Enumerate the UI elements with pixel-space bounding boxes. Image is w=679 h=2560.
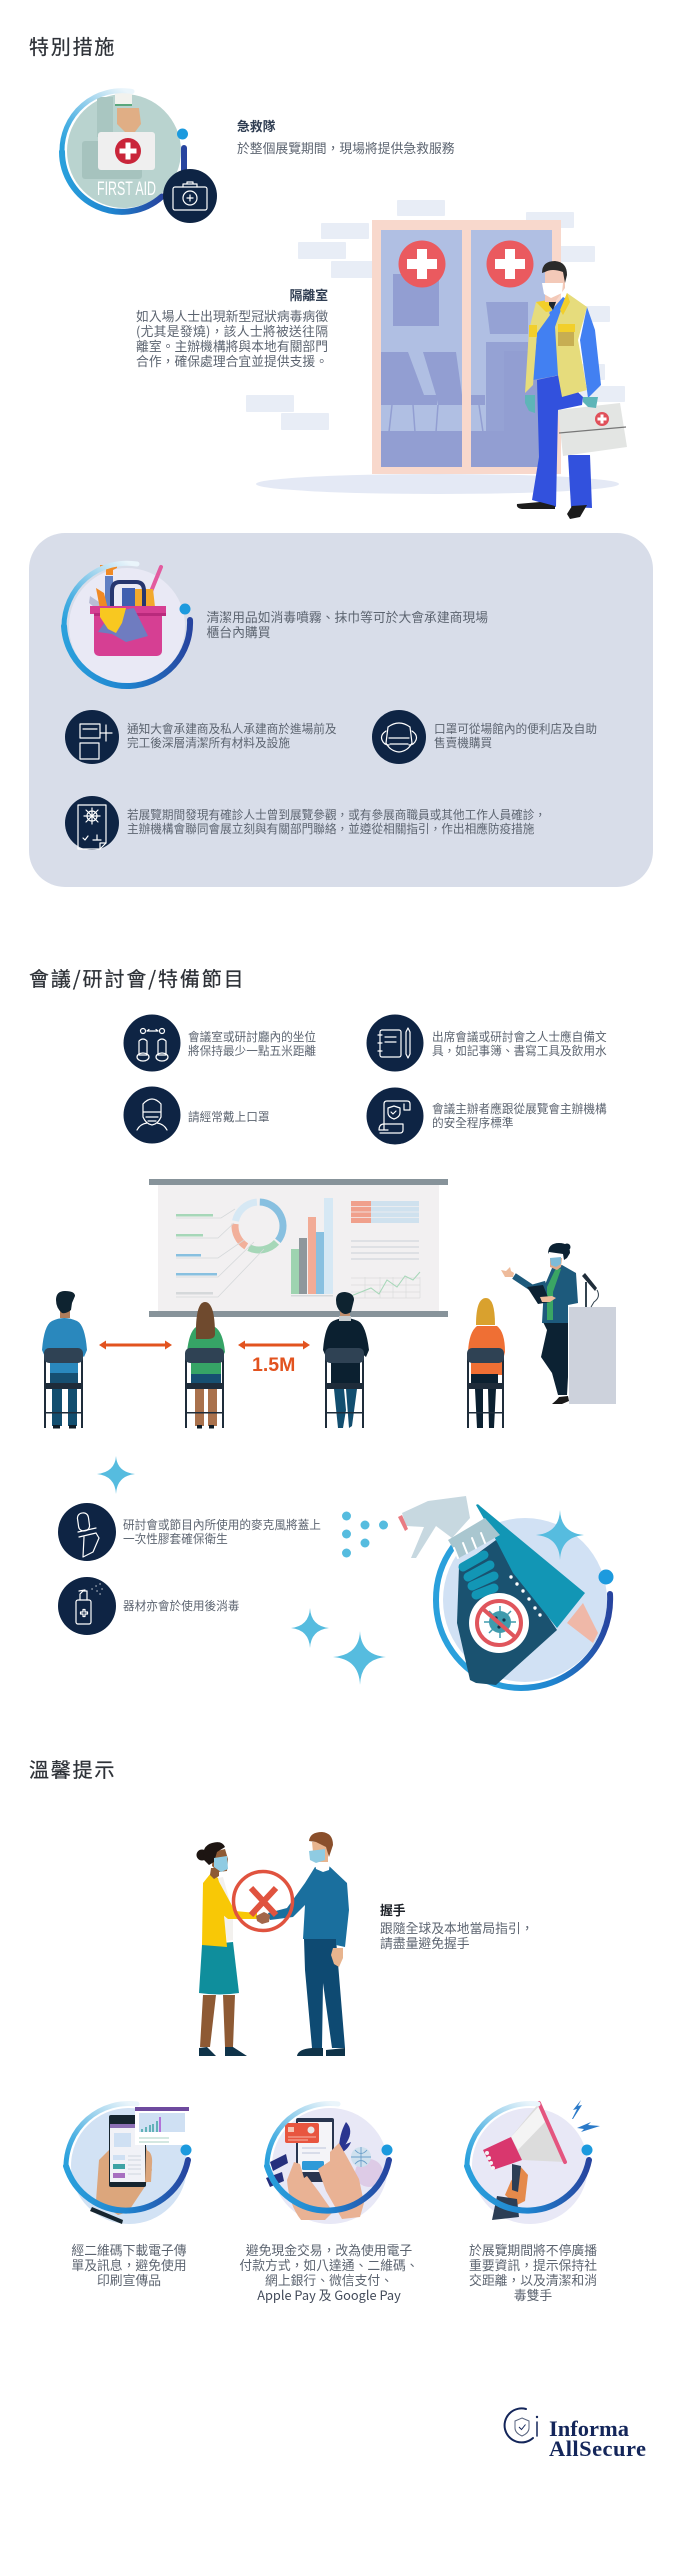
illustration: mobile payment <box>266 2103 392 2224</box>
illustration: first aid circle <box>62 91 188 212</box>
text: notify contractors: 通知大會承建商及私人承建商於進場前及 <box>127 720 337 737</box>
text: masks available: 口罩可從場館內的便利店及自助 <box>434 720 597 737</box>
logo: Informa AllSecure: Informa <box>549 2416 629 2441</box>
text: QR download <box>71 2240 187 2289</box>
text block: first aid team: 急救隊 <box>237 116 276 135</box>
figure: man <box>268 1832 349 2056</box>
text: cleaning supplies note: 清潔用品如消毒噴霧、抹巾等可於大會承建商現場 <box>206 607 488 626</box>
icon: person wearing mask <box>124 1086 180 1144</box>
text block: isolation room: (尤其是發燒)，該人士將被送往隔 <box>136 321 328 340</box>
icon: clasped hands <box>256 1912 270 1924</box>
text block: handshake <box>380 1900 534 1952</box>
text block: isolation room: 隔離室 <box>290 285 328 304</box>
text block: handshake: 握手 <box>380 1900 406 1919</box>
text: bring own stationery <box>432 1028 607 1059</box>
icon: sparkle mid <box>291 1608 329 1648</box>
text: cashless payment: Apple Pay 及 Google Pay <box>257 2285 401 2304</box>
icon: deep clean <box>65 710 119 764</box>
text block: handshake: 請盡量避免握手 <box>380 1933 470 1952</box>
text: disinfect equipment: 器材亦會於使用後消毒 <box>123 1597 240 1614</box>
text block: handshake: 跟隨全球及本地當局指引， <box>380 1918 534 1937</box>
icon: prohibited circle <box>234 1872 292 1930</box>
text: announcements: 毒雙手 <box>514 2285 552 2304</box>
text block: isolation room: 合作，確保處理合宜並提供支援。 <box>136 351 328 370</box>
text: notify contractors: 完工後深層清潔所有材料及設施 <box>127 734 290 751</box>
icon: sparkle on circle <box>536 1510 584 1560</box>
text: seat spacing: 會議室或研討廳內的坐位 <box>188 1028 316 1045</box>
text block: isolation room: 離室。主辦機構將與本地有關部門 <box>136 336 328 355</box>
illustration: isolation room <box>246 200 625 494</box>
chart: donut <box>176 1202 283 1297</box>
text: confirmed case procedure <box>127 806 546 837</box>
text: follow safety procedure: 會議主辦者應跟從展覽會主辦機構 <box>432 1100 607 1117</box>
heading: conferences and seminars: 會議/研討會/特備節目 <box>29 963 246 992</box>
chart: table <box>351 1201 419 1259</box>
figure: woman <box>196 1842 257 2056</box>
figure: medic with first aid case <box>517 261 627 519</box>
logo: Informa AllSecure: AllSecure <box>549 2436 646 2461</box>
label: 1.5M distance: 1.5M <box>252 1354 295 1376</box>
text: QR download: 單及訊息，避免使用 <box>71 2255 187 2274</box>
illustration: no handshake <box>196 1832 349 2056</box>
illustration: cleaning bucket <box>64 563 190 686</box>
seated attendee 2 <box>185 1302 225 1428</box>
icon: safety scroll <box>366 1088 424 1144</box>
seated attendee 3 <box>323 1292 369 1428</box>
text: confirmed case procedure: 若展覽期間發現有確診人士曾到展覽參觀，或有參展商職員或其他工作人員確診， <box>127 806 546 823</box>
text: QR download: 印刷宣傳品 <box>97 2270 161 2289</box>
text: cashless payment: 避免現金交易，改為使用電子 <box>246 2240 412 2259</box>
text block: isolation room: 如入場人士出現新型冠狀病毒病徵 <box>136 306 328 325</box>
text block: first aid team <box>237 116 455 157</box>
text: microphone covers <box>123 1516 321 1547</box>
text: follow safety procedure: 的安全程序標準 <box>432 1114 514 1131</box>
text: cashless payment: 付款方式，如八達通、二維碼、 <box>239 2255 419 2274</box>
text: bring own stationery: 出席會議或研討會之人士應自備文 <box>432 1028 607 1045</box>
text: cleaning supplies note: 櫃台內購買 <box>206 622 271 641</box>
icon: notebook and pen <box>366 1014 424 1072</box>
illustration: disinfectant spray bottle <box>342 1496 614 1688</box>
text: masks available: 售賣機購買 <box>434 734 493 751</box>
text: announcements <box>469 2240 597 2304</box>
heading: friendly reminders: 溫馨提示 <box>29 1754 116 1783</box>
text: seat spacing <box>188 1028 316 1059</box>
text: seat spacing: 將保持最少一點五米距離 <box>188 1042 316 1059</box>
chart: bars <box>291 1198 333 1296</box>
icon: sparkle lower <box>333 1631 386 1685</box>
text: cashless payment <box>239 2240 419 2304</box>
illustration: first aid circle: FIRST AID <box>97 179 156 200</box>
icon: virus report <box>65 796 119 850</box>
illustration: phone with QR brochure <box>66 2103 192 2224</box>
illustration: speaker at podium <box>501 1243 616 1404</box>
text: announcements: 交距離，以及清潔和消 <box>469 2270 597 2289</box>
text: cleaning supplies note <box>206 607 488 641</box>
text: QR download: 經二維碼下載電子傳 <box>71 2240 187 2259</box>
chart: line chart <box>351 1272 420 1298</box>
icon: sparkle top left <box>97 1456 135 1494</box>
seated attendee 1 <box>42 1291 87 1428</box>
text: masks available <box>434 720 597 751</box>
chart: legend lines <box>176 1214 217 1294</box>
arrow: distance left <box>99 1340 172 1350</box>
icon: first aid kit <box>163 169 217 223</box>
arrow: distance right <box>238 1340 310 1350</box>
icon: microphone cover <box>58 1503 116 1561</box>
text: bring own stationery: 具，如記事簿、書寫工具及飲用水 <box>432 1042 607 1059</box>
text block: first aid team: 於整個展覽期間，現場將提供急救服務 <box>237 138 455 157</box>
text: confirmed case procedure: 主辦機構會聯同會展立刻與有關部門聯絡，並遵從相關指引，作出相應防疫措施 <box>127 820 535 837</box>
icon: face mask <box>372 710 426 764</box>
text: notify contractors <box>127 720 337 751</box>
text: wear mask: 請經常戴上口罩 <box>188 1108 269 1125</box>
text: announcements: 重要資訊，提示保持社 <box>469 2255 597 2274</box>
illustration: megaphone <box>467 2100 600 2224</box>
icon: sanitizer spray <box>58 1577 116 1635</box>
text: follow safety procedure <box>432 1100 607 1131</box>
text block: isolation room <box>136 285 328 370</box>
text: microphone covers: 研討會或節目內所使用的麥克風將蓋上 <box>123 1516 321 1533</box>
icon: seat distance <box>124 1014 180 1072</box>
panel: cleaning supplies <box>29 533 653 887</box>
seated attendee 4 <box>467 1298 505 1428</box>
text: cashless payment: 網上銀行、微信支付、 <box>265 2270 393 2289</box>
text: announcements: 於展覽期間將不停廣播 <box>469 2240 597 2259</box>
illustration: presentation screen <box>149 1179 448 1317</box>
text: microphone covers: 一次性膠套確保衛生 <box>123 1530 228 1547</box>
heading: special measures: 特別措施 <box>29 31 116 60</box>
logo: Informa AllSecure <box>505 2408 646 2461</box>
